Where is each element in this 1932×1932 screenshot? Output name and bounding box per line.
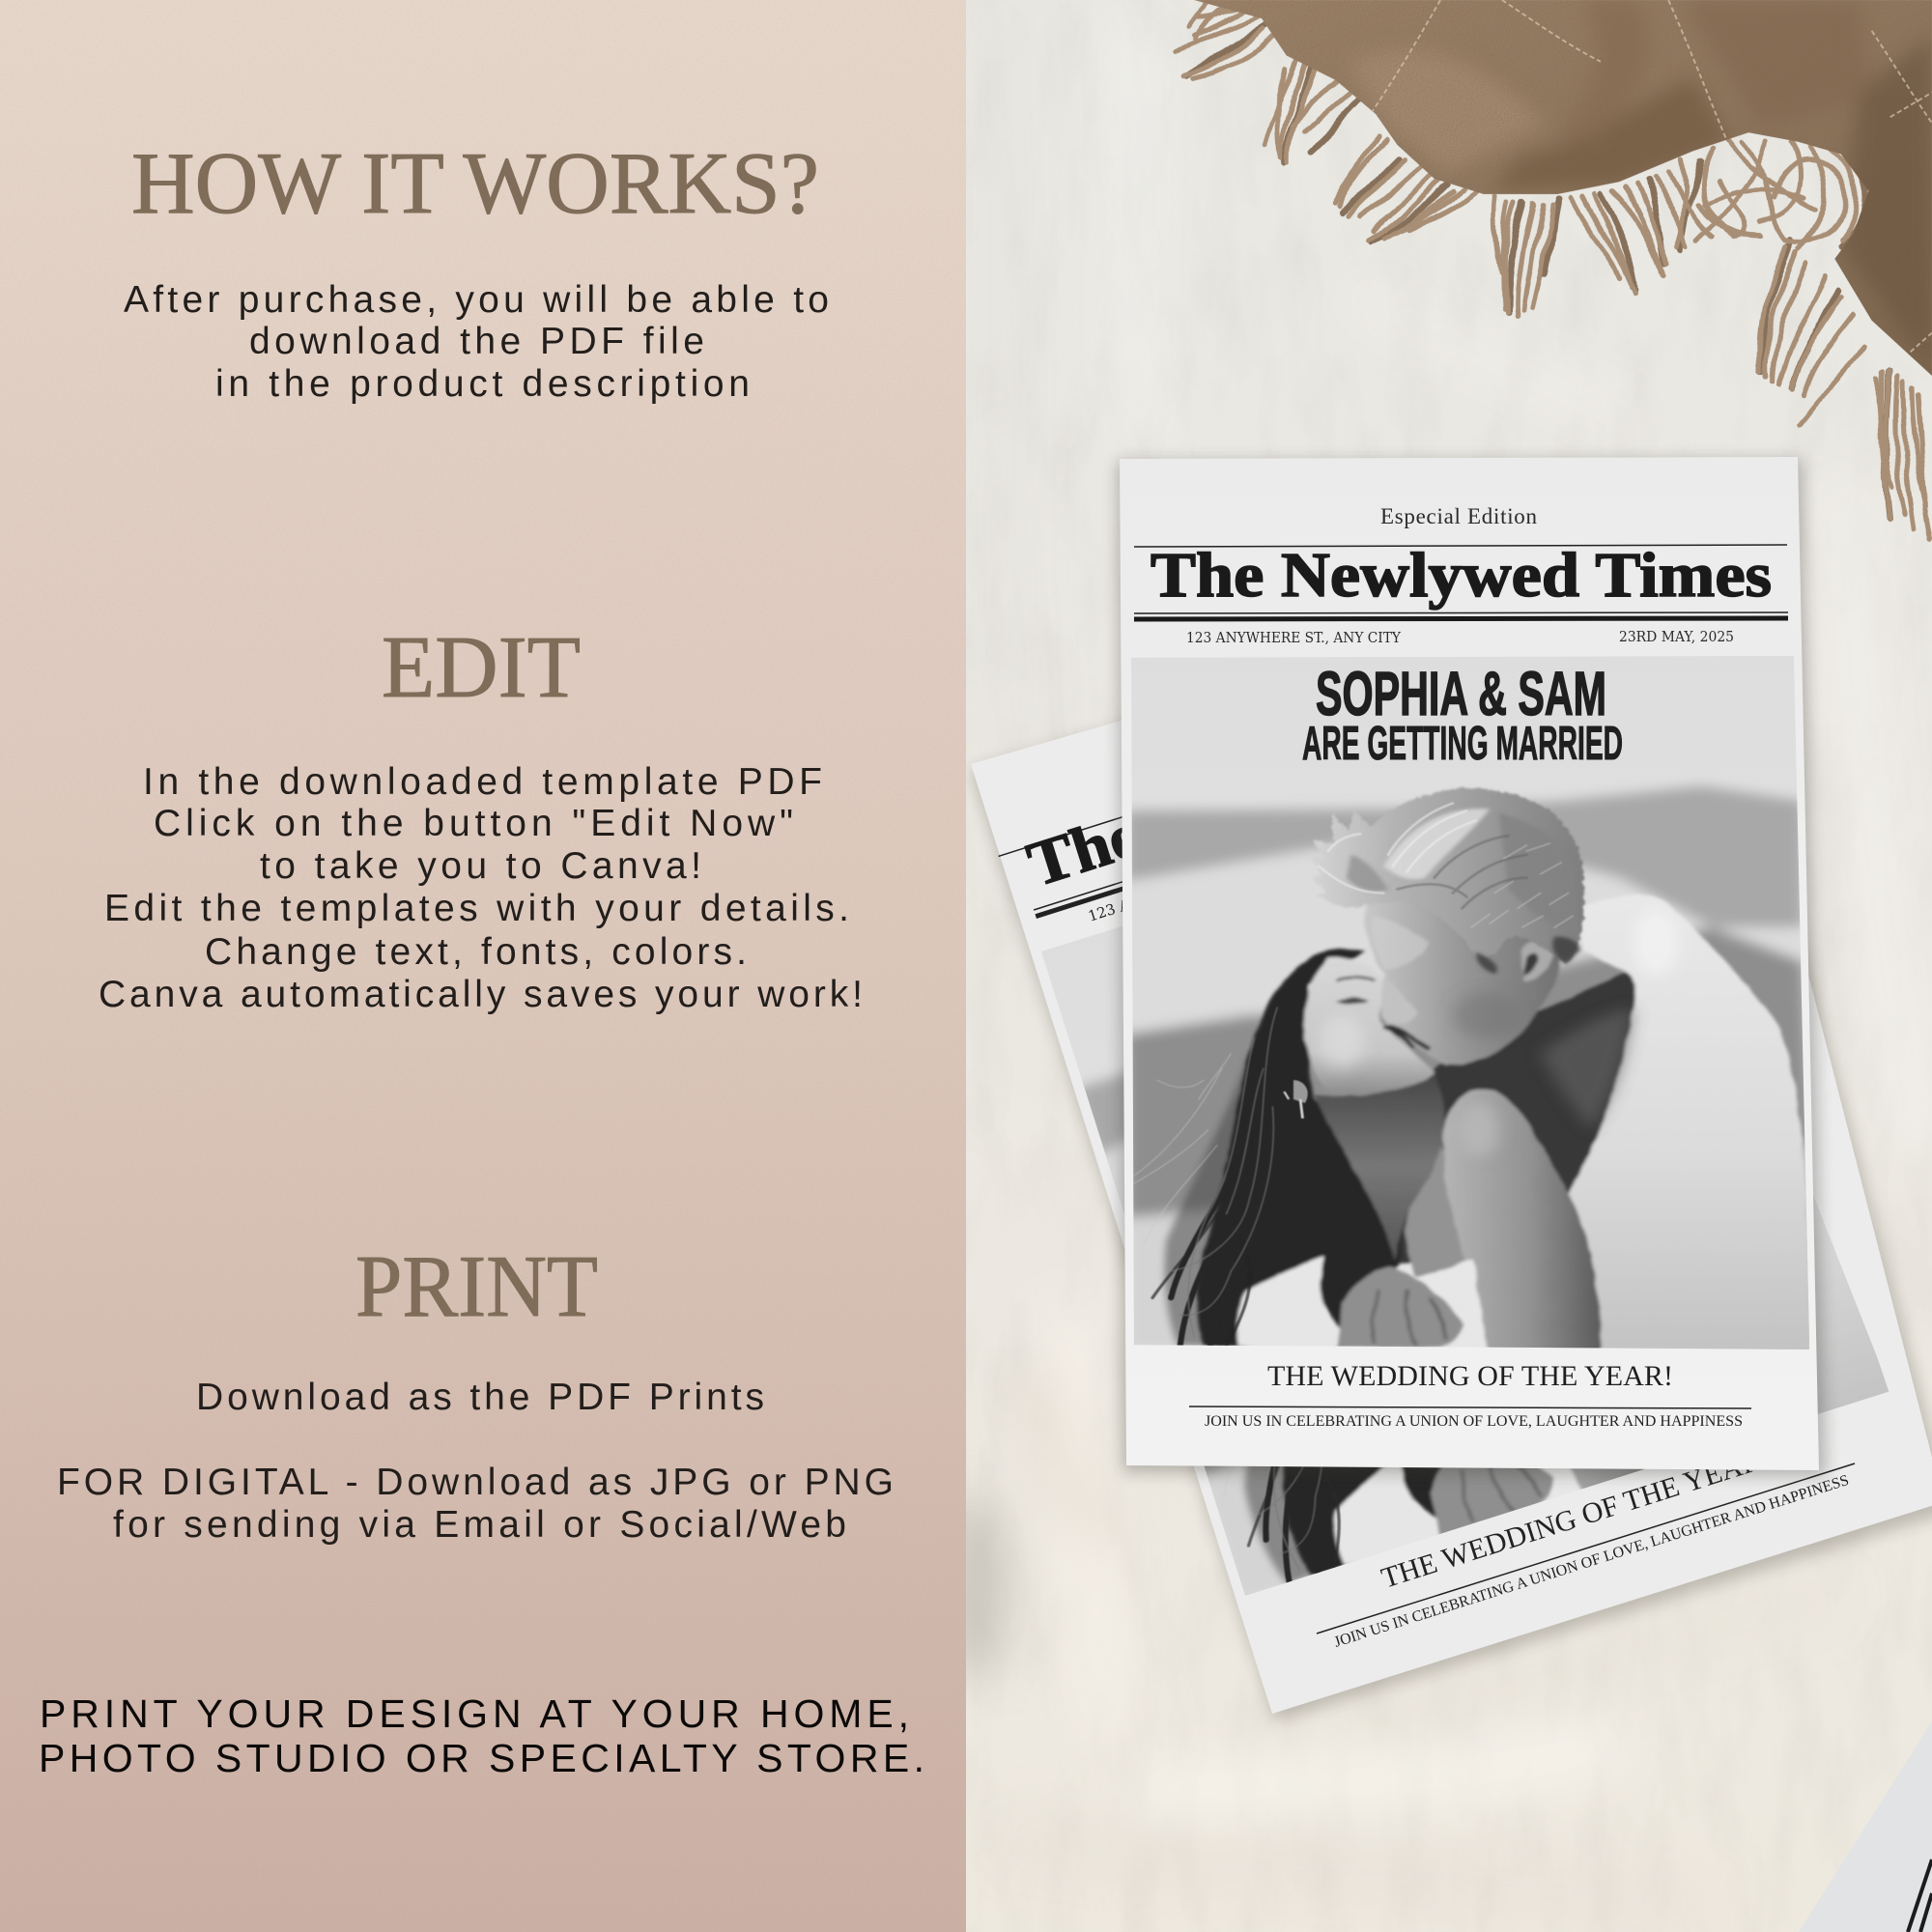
text: edit steps: Click on the button "Edit Now": [154, 803, 793, 844]
man's face: [1365, 881, 1563, 1065]
hand: [1336, 1266, 1464, 1348]
text: print steps: FOR DIGITAL - Download as JPG or PNG: [57, 1462, 894, 1503]
woman's neck: [1314, 1074, 1444, 1260]
text: edit steps: to take you to Canva!: [260, 845, 701, 887]
earring: [1284, 1080, 1308, 1119]
edition label: Especial Edition: [1380, 504, 1538, 528]
couple soft forms: [1197, 881, 1811, 1351]
text: after purchase: [124, 279, 829, 405]
soft shading on figures: [1319, 908, 1679, 1156]
back card masthead: The Newlywed Times: [1019, 646, 1631, 900]
date: 23RD MAY, 2025: [1619, 630, 1734, 645]
text: edit steps: Canva automatically saves your work!: [99, 974, 863, 1015]
white sheet front: [1237, 1256, 1337, 1348]
text: edit steps: Edit the templates with your details.: [104, 888, 849, 929]
panel: brown fringed scarf: [1176, 0, 1932, 542]
sub headline: ARE GETTING MARRIED: [1302, 718, 1623, 770]
footer tagline: JOIN US IN CELEBRATING A UNION OF LOVE, LAUGHTER AND HAPPINESS: [1205, 1413, 1743, 1430]
scarf body: [1176, 0, 1932, 382]
text: closing note: [39, 1691, 924, 1780]
man's hair: [1309, 788, 1584, 974]
woman's face: [1304, 957, 1435, 1094]
man's ear: [1520, 939, 1554, 980]
text: after purchase: in the product description: [215, 363, 750, 405]
back card masthead: 123 ANYWHERE ST., ANY CITY: [1086, 838, 1315, 925]
woman's arm and shoulder: [1443, 1090, 1601, 1351]
shadow under back card: [971, 558, 1932, 1721]
panel: linen background: [966, 0, 1932, 1932]
panel: instructions: [0, 0, 966, 1932]
heading: print: PRINT: [355, 1237, 598, 1335]
back card footer: THE WEDDING OF THE YEAR!: [1378, 1441, 1774, 1595]
dark chest and shadow: [1370, 970, 1642, 1264]
masthead title: The Newlywed Times: [1151, 540, 1772, 611]
panel: front newspaper card: [1120, 457, 1819, 1470]
white blanket: [1568, 895, 1811, 1351]
back card photo: [1027, 730, 1894, 1605]
woman's hair strands: [1134, 1008, 1277, 1346]
shadow under front card: [1118, 460, 1826, 1476]
footer headline: THE WEDDING OF THE YEAR!: [1267, 1360, 1673, 1392]
heading: edit: EDIT: [382, 618, 581, 716]
heading: how it works: HOW IT WORKS?: [131, 134, 819, 232]
text: after purchase: After purchase, you will be able to: [124, 279, 829, 321]
woman's hair mass: [1197, 949, 1406, 1347]
text: edit steps: [99, 761, 863, 1015]
text: edit steps: Change text, fonts, colors.: [205, 931, 747, 973]
text: print steps: for sending via Email or Social/Web: [113, 1504, 846, 1546]
text: edit steps: In the downloaded template PDF: [143, 761, 822, 803]
address: 123 ANYWHERE ST., ANY CITY: [1186, 631, 1401, 646]
hair underlay: [1165, 1054, 1249, 1346]
text: after purchase: download the PDF file: [249, 321, 704, 362]
scarf fringe strands: [1176, 0, 1932, 542]
text: print steps: Download as the PDF Prints: [196, 1377, 764, 1418]
text: closing note: PRINT YOUR DESIGN AT YOUR HOME,: [40, 1691, 909, 1736]
footer rule: [1189, 1406, 1751, 1408]
text: print steps: [57, 1377, 894, 1546]
photo: kissing couple: [1124, 652, 1813, 1351]
corner card fragment: [1799, 1721, 1932, 1932]
woman's chest: [1406, 1145, 1473, 1277]
masthead rule bottom: [1134, 612, 1788, 619]
text: closing note: PHOTO STUDIO OR SPECIALTY STORE.: [39, 1736, 924, 1780]
names headline: SOPHIA & SAM: [1316, 659, 1606, 728]
panel: back newspaper card: JOIN US IN CELEBRATING A UNION OF LOVE, LAUGHTER AND HAPPINESS: [1332, 1472, 1851, 1651]
masthead rule top: [1134, 545, 1787, 547]
panel: back newspaper card: [971, 721, 1932, 1714]
